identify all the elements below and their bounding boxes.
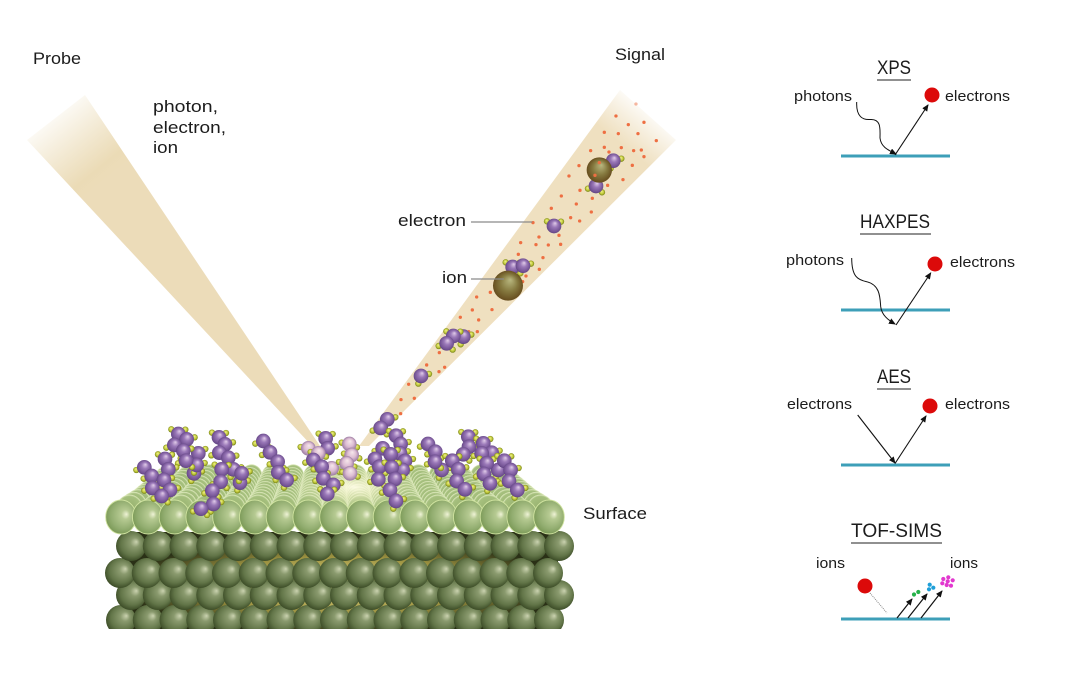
surface line [841,464,950,466]
label: signal: Signal [615,45,665,64]
surface line [841,618,950,620]
outgoing arrow [895,416,926,464]
heading: XPS: XPS [877,58,911,79]
cluster 6 [417,429,480,500]
surface line [841,154,950,158]
outgoing arrow [895,105,928,155]
surface line [841,308,950,312]
cluster 4 [297,430,344,501]
heading: AES: AES [877,367,911,388]
signal particles in beam [370,102,658,437]
label: electron: electron [398,211,466,230]
outgoing arrow [896,273,931,325]
label: photon, electron, ion [153,97,226,157]
text: incoming electrons: electrons [787,397,852,413]
heading: HAXPES: HAXPES [860,212,930,233]
heading: TOF-SIMS: TOF-SIMS [851,521,942,542]
ejection arrows [897,591,942,618]
text: incoming ions: ions [816,556,845,572]
blue ions [927,583,935,591]
label: ion: ion [442,268,467,287]
panel: TOF-SIMS [816,521,978,619]
pale molecules at beam focus [336,437,362,481]
text: electrons: electrons [950,255,1015,271]
surface block [105,464,574,635]
label: photon, electron, ion: photon, [153,97,218,116]
dotted ion trail [870,593,887,613]
green ions [912,590,920,597]
leader lines [471,222,532,279]
subsurface atom rows [105,531,574,635]
text: outgoing ions: ions [950,556,978,572]
label: photon, electron, ion: ion [153,138,178,157]
main labels [33,45,665,523]
ejected molecules [370,153,624,437]
surface front atom row [106,500,564,534]
red electron [924,88,940,102]
lattice gaps [122,532,558,629]
label: probe: Probe [33,49,81,68]
cluster 7 [470,435,528,501]
wavy incoming arrow [857,102,896,154]
text: outgoing electrons: electrons [945,397,1010,413]
label: photon, electron, ion: electron, [153,118,226,137]
probe beam [27,95,320,446]
cluster 3 [252,434,298,491]
panel: HAXPES [786,212,1015,325]
signal beam [359,90,676,446]
cluster 5 [364,428,416,512]
red electron [928,256,942,272]
text: photons: photons [794,89,852,105]
panel: XPS [794,58,1010,156]
wavy incoming arrow [852,258,895,324]
incoming arrow [858,415,895,463]
label: surface: Surface [583,504,647,523]
clip below block [90,629,590,659]
impact glow [292,465,416,509]
electron dots [393,102,658,421]
primary ion [858,578,872,594]
cluster 1 [133,426,208,505]
text: electrons: electrons [945,89,1010,105]
text: photons: photons [786,253,844,269]
ion spheres [493,157,612,301]
magenta ions [940,575,955,588]
red electron [922,398,938,414]
panel: AES [787,367,1010,465]
surface ridges [116,464,554,523]
cluster 2 [190,429,253,518]
adsorbed molecules [133,426,528,518]
